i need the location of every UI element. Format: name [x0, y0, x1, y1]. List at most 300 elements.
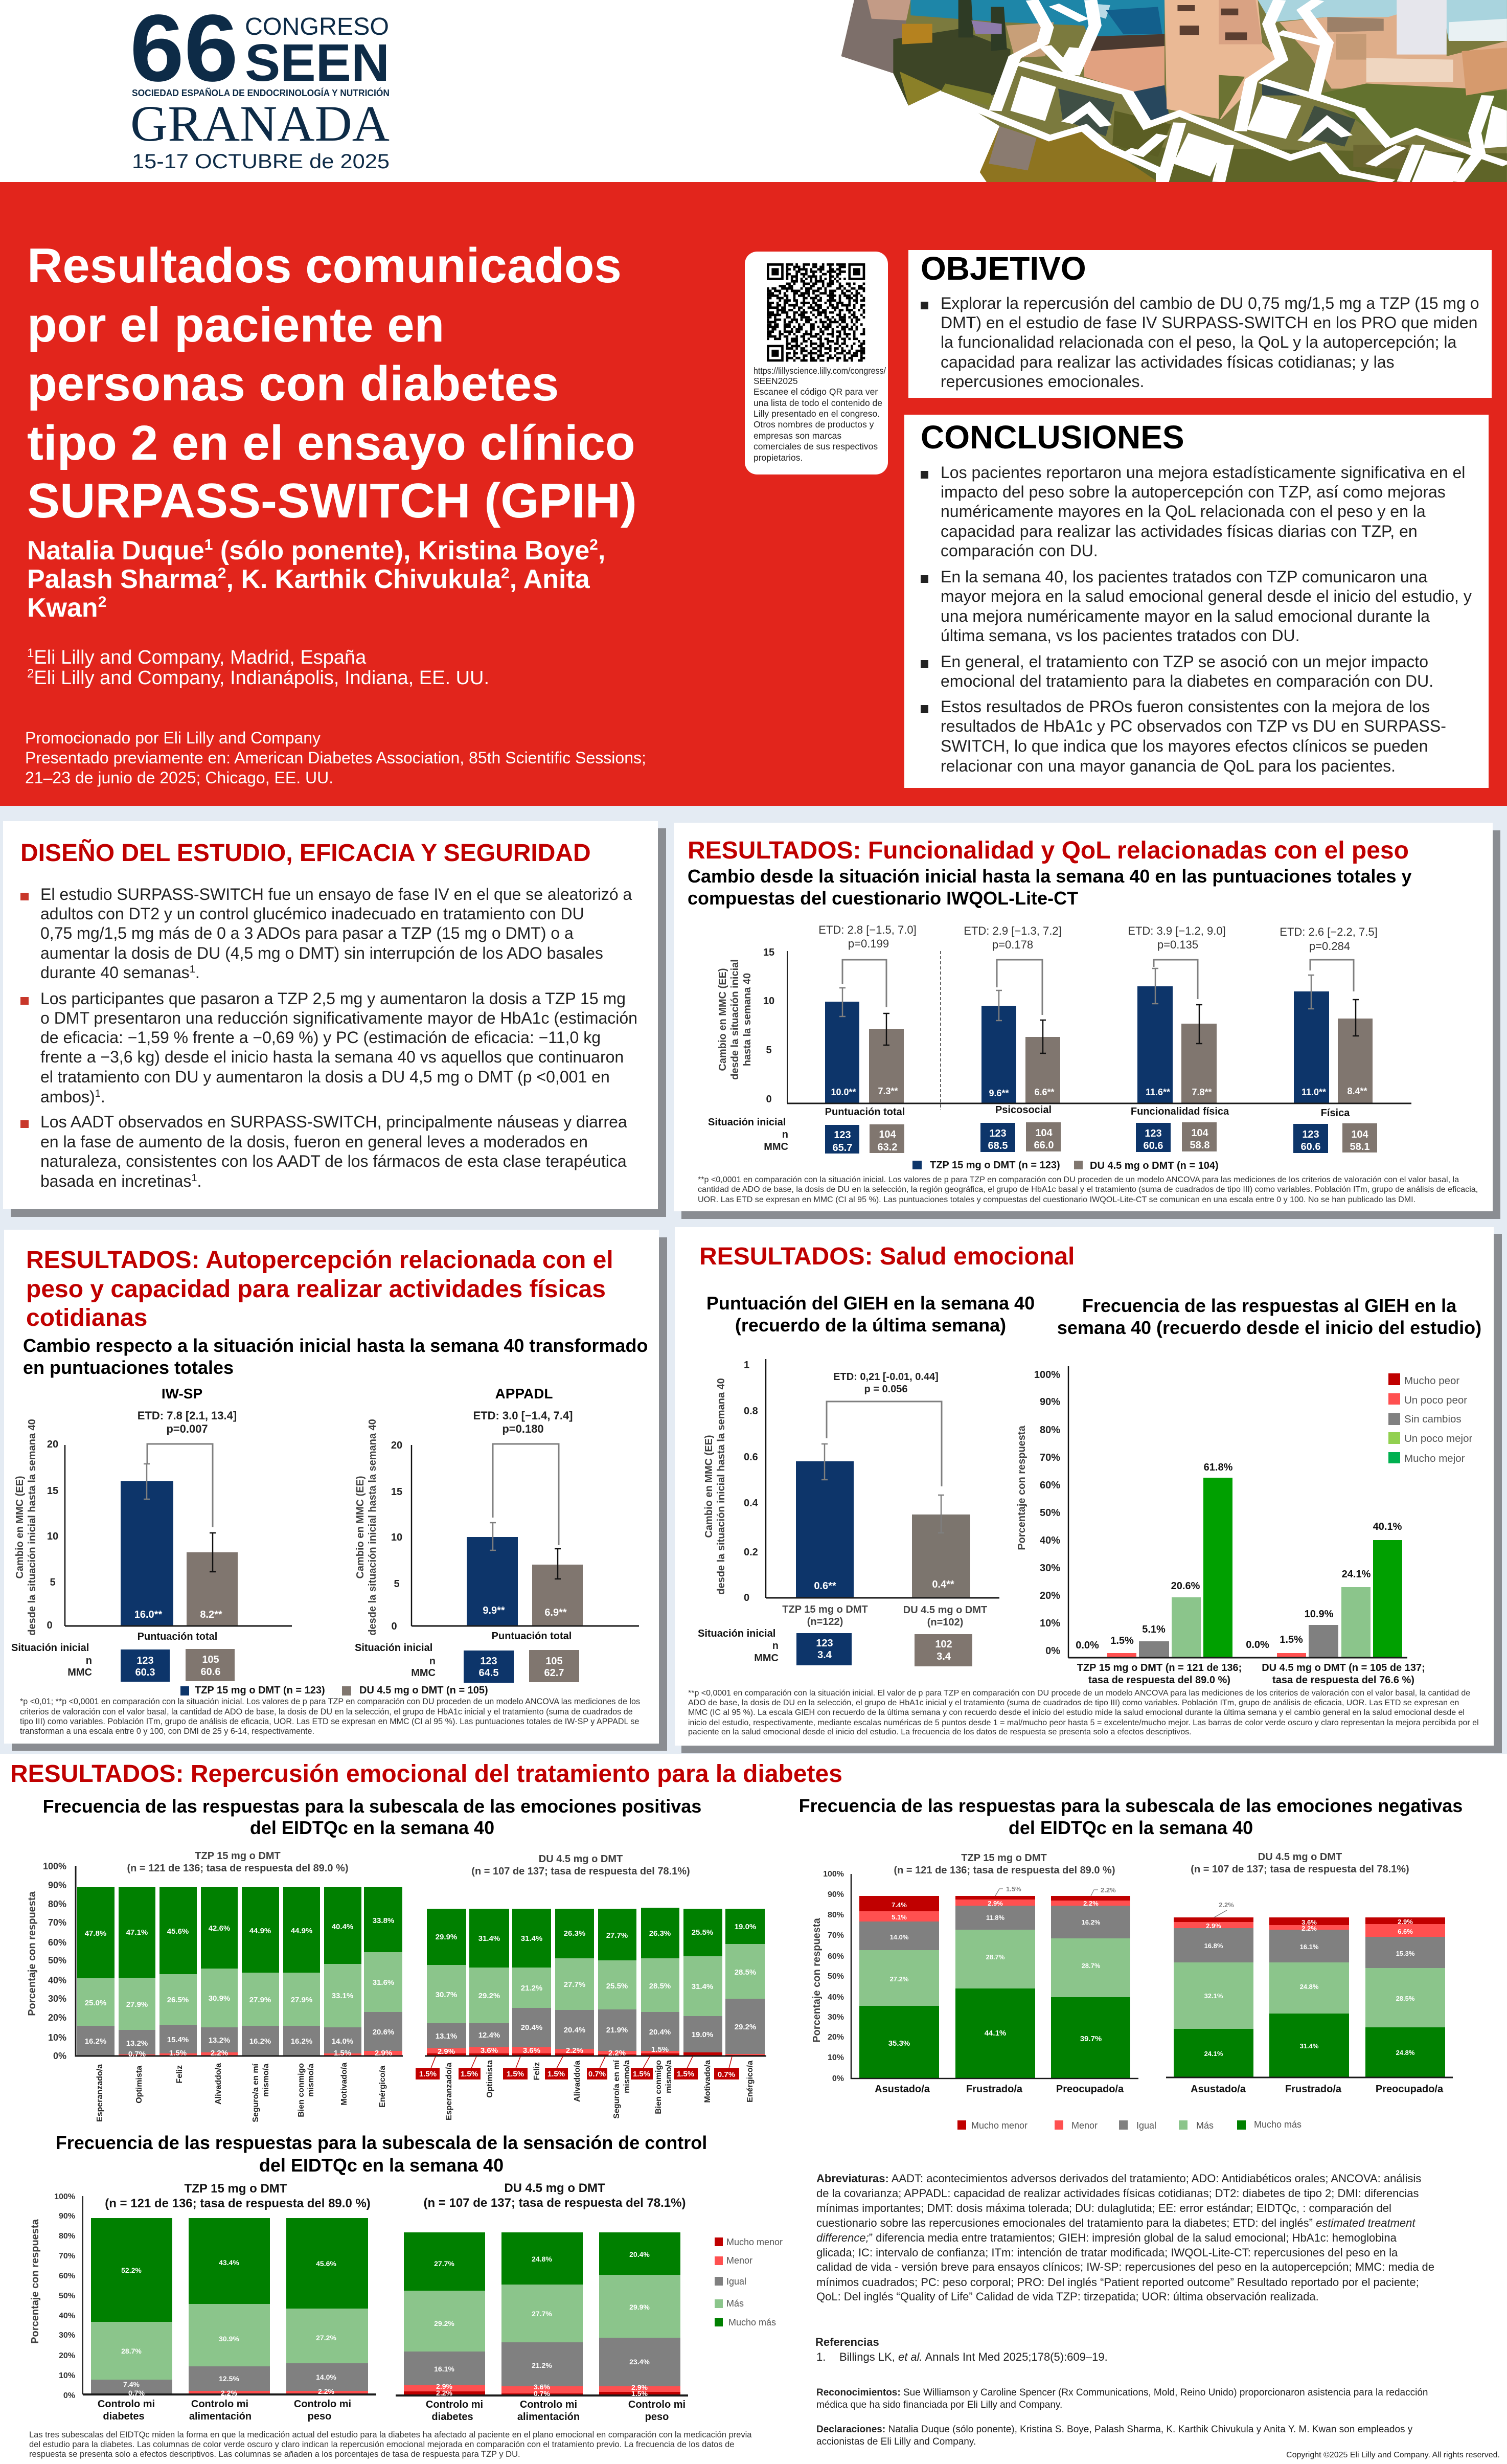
y axis title [717, 959, 753, 1080]
panel: funcionalidad y QoL: RESULTADOS: Funcionalidad y QoL relacionadas con el peso [688, 837, 1409, 864]
stacked chart: positive emotions TZP: 20% [48, 2013, 66, 2023]
bar chart: IW-SP: MMC [67, 1667, 92, 1678]
bar chart: GIEH response frequency: 90% [1040, 1396, 1060, 1408]
bar chart: GIEH score: (n=102) [927, 1617, 963, 1628]
footnote: del estudio para la diabetes. Las columnas de color verde oscuro y claro indican la repercusión emocional mejorada en comparación con el tratamiento previo. La frecuencia de los datos de [29, 2440, 734, 2449]
authors: 1 [204, 536, 213, 553]
stacked chart: negative emotions TZP: 35.3% [888, 2039, 910, 2048]
legend: Mucho menor [726, 2237, 783, 2247]
abbreviations [816, 2172, 1434, 2303]
disclosures: accionistas de Eli Lilly and Company. [816, 2436, 976, 2447]
red callouts: 1.5% [419, 2070, 437, 2078]
stacked chart: positive emotions TZP: Motivado/a [340, 2063, 349, 2106]
stacked chart: positive emotions DU: 19.0% [735, 1923, 756, 1931]
y axis title: hasta la semana 40 [742, 973, 753, 1066]
footnote: Las tres subescalas del EIDTQc miden la forma en que la medicación actual del estudio para la diabetes ha afectado al paciente en el plano emocional en comparación con la medicación previa [29, 2430, 752, 2439]
panel: diseño del estudio: basada en incretinas [40, 1172, 191, 1190]
bar chart: IWQOL-Lite-CT: 7.8** [1192, 1087, 1212, 1097]
stacked chart: negative emotions TZP: 0% [832, 2074, 844, 2083]
stacked chart: positive emotions TZP: 60% [48, 1937, 66, 1948]
stacked chart: sense of control DU: 2.2% [436, 2389, 453, 2397]
QR caption: empresas son marcas [754, 431, 841, 441]
bar chart: IWQOL-Lite-CT: 5 [766, 1045, 772, 1056]
panel: diseño del estudio: ambos) [40, 1088, 95, 1106]
panel: objetivo: OBJETIVO [921, 250, 1086, 287]
stacked chart: sense of control TZP: 30.9% [219, 2335, 239, 2343]
panel: repercusión emocional: del EIDTQc en la semana 40 [250, 1817, 494, 1838]
stacked chart: positive emotions DU: 29.9% [436, 1933, 457, 1941]
affiliations: 1 [27, 646, 34, 660]
baseline table: 63.2 [878, 1142, 897, 1153]
bar chart: APPADL: 15 [391, 1486, 402, 1498]
bar chart: IW-SP: 0 [47, 1620, 53, 1631]
footnote: paciente en la salud emocional desde el inicio del estudio. La frecuencia de los datos de respuesta se presenta solo a efectos descriptivos. [688, 1728, 1192, 1736]
panel: objetivo: repercusiones emocionales. [941, 372, 1144, 391]
stacked chart: positive emotions TZP: 0% [53, 2051, 66, 2061]
bar chart: APPADL: Cambio en MMC (EE) [355, 1476, 366, 1579]
stacked chart: negative emotions TZP: 16.2% [1082, 1918, 1101, 1926]
stacked chart: positive emotions DU: 25.5% [606, 1982, 628, 1991]
stacked chart: positive emotions TZP: Optimista [135, 2066, 144, 2104]
bar chart: APPADL: p=0.180 [502, 1422, 544, 1435]
stacked chart: positive emotions DU: 27.7% [564, 1980, 585, 1989]
abbreviations: mínimas importantes; DMT: dosis máxima tolerada; DU: dulaglutida; EE: error estándar; EIDTQc, : comparación del [816, 2202, 1391, 2214]
stacked chart: negative emotions TZP: (n = 121 de 136; tasa de respuesta del 89.0 %) [894, 1865, 1115, 1876]
bar chart: GIEH response frequency: 0% [1045, 1645, 1060, 1657]
bar chart: GIEH score: DU 4.5 mg o DMT [903, 1604, 987, 1616]
bar chart: APPADL: APPADL [495, 1386, 553, 1401]
abbreviations: QoL: Del inglés “Quality of Life” Calidad de vida TZP: tirzepatida; UOR: última observación realizada. [816, 2290, 1319, 2303]
authors: , [598, 536, 605, 566]
bar chart: IW-SP: 10 [47, 1531, 58, 1542]
poster title: por el paciente en [27, 298, 444, 352]
QR caption: Otros nombres de productos y [754, 419, 874, 429]
stacked chart: negative emotions TZP: Frustrado/a [966, 2084, 1023, 2095]
stacked chart: sense of control TZP: 80% [59, 2232, 75, 2241]
disclosures [816, 2424, 1413, 2447]
stacked chart: positive emotions DU: 26.3% [564, 1929, 585, 1938]
abbreviations: glicada; IC: intervalo de confianza; ITm: intención de tratar modificada; IWQOL-Lite-CT: repercusiones del peso en la [816, 2246, 1398, 2259]
QR caption [754, 366, 886, 463]
stacked chart: positive emotions TZP: 100% [43, 1861, 66, 1871]
bar chart: GIEH response frequency: TZP 15 mg o DMT (n = 121 de 136; [1077, 1662, 1242, 1674]
stacked chart: positive emotions TZP: Seguro/a en mí [252, 2063, 260, 2122]
congress logo: SOCIEDAD ESPAÑOLA DE ENDOCRINOLOGÍA Y NUTRICIÓN [132, 87, 390, 98]
stacked chart: negative emotions DU: 2.9% [1398, 1918, 1413, 1926]
panel: diseño del estudio: . [101, 1088, 105, 1106]
authors: (sólo ponente), Kristina Boye [213, 536, 589, 566]
baseline table: 104 [879, 1129, 897, 1140]
stacked chart: sense of control TZP: 30% [59, 2331, 75, 2340]
legend: Mucho más [728, 2317, 776, 2327]
stacked chart: positive emotions TZP: 31.6% [373, 1978, 394, 1987]
stacked chart: sense of control TZP: Controlo mi [191, 2399, 248, 2410]
footnote: *p <0,01; **p <0,0001 en comparación con la situación inicial. Los valores de p para TZP en comparación con DU proceden de un modelo ANCOVA las mediciones de los [20, 1697, 640, 1706]
bar chart: IW-SP: 15 [47, 1485, 58, 1497]
sponsor note: Presentado previamente en: American Diabetes Association, 85th Scientific Sessions; [25, 749, 646, 767]
ETD annotations [818, 923, 1378, 953]
ETD annotations: p=0.135 [1157, 938, 1198, 951]
legend [715, 2237, 783, 2327]
stacked chart: positive emotions TZP: (n = 121 de 136; tasa de respuesta del 89.0 %) [127, 1863, 349, 1874]
gray callouts: 2.2% [1101, 1886, 1116, 1894]
authors: 2 [501, 565, 510, 582]
congress logo: 15-17 OCTUBRE de 2025 [132, 150, 390, 173]
baseline table: 66.0 [1034, 1140, 1054, 1151]
bar chart: GIEH score: 0.6 [744, 1452, 758, 1463]
stacked chart: sense of control DU [396, 2181, 688, 2423]
acknowledgements [816, 2387, 1428, 2410]
panel: autopercepción y APPADL: en puntuaciones totales [23, 1357, 234, 1378]
stacked chart: sense of control DU: 23.4% [629, 2358, 650, 2366]
stacked chart: positive emotions TZP: mismo/a [307, 2064, 315, 2097]
bar chart: APPADL: desde la situación inicial hasta la semana 40 [367, 1419, 378, 1636]
bar chart: APPADL: 123 [480, 1656, 497, 1667]
red callouts: 1.5% [507, 2070, 524, 2078]
bar chart: APPADL: 0 [391, 1621, 397, 1632]
stacked chart: negative emotions DU: 6.6% [1398, 1928, 1413, 1935]
stacked chart: sense of control TZP: 70% [59, 2252, 75, 2260]
panel: diseño del estudio: o DMT presentaron una reducción significativamente mayor de HbA1c (estimación [40, 1009, 637, 1027]
footnote [29, 2430, 752, 2459]
panel: conclusiones: resultados de HbA1c y PC observados con TZP vs DU en SURPASS- [941, 717, 1446, 735]
baseline table: 123 [834, 1129, 851, 1141]
footnote [688, 1689, 1479, 1736]
panel: funcionalidad y QoL: compuestas del cuestionario IWQOL-Lite-CT [688, 888, 1078, 909]
legend [1388, 1373, 1472, 1464]
QR card [745, 252, 888, 474]
stacked chart: positive emotions TZP: 27.9% [249, 1996, 271, 2004]
stacked chart: sense of control TZP: diabetes [103, 2411, 145, 2422]
stacked chart: sense of control TZP: TZP 15 mg o DMT [185, 2182, 287, 2196]
abbreviations: difference;” diferencia media entre tratamientos; GIEH: impresión global de la salud emocional; HbA1c: hemoglobina [816, 2231, 1397, 2244]
bar chart: GIEH response frequency: 1.5% [1110, 1635, 1134, 1646]
stacked chart: positive emotions TZP: 30.9% [209, 1994, 230, 2003]
bar chart: GIEH score: 0 [744, 1592, 749, 1603]
stacked chart: sense of control DU: (n = 107 de 137; tasa de respuesta del 78.1%) [424, 2196, 686, 2210]
bar chart: GIEH score: ETD: 0,21 [-0.01, 0.44] [833, 1371, 939, 1383]
stacked chart: negative emotions TZP: 20% [828, 2033, 844, 2042]
bar chart: GIEH score [698, 1359, 999, 1666]
panel: diseño del estudio: frente a −3,6 kg) desde el inicio hasta la semana 40 vs aquellos que continuaron [40, 1048, 624, 1066]
bar chart: GIEH response frequency: tasa de respuesta del 89.0 %) [1088, 1675, 1230, 1686]
stacked chart: negative emotions DU: (n = 107 de 137; tasa de respuesta del 78.1%) [1191, 1864, 1409, 1875]
ETD annotations: p=0.284 [1309, 940, 1350, 953]
bar chart: GIEH response frequency: 1.5% [1280, 1634, 1303, 1645]
bar chart: GIEH score: desde la situación inicial hasta la semana 40 [716, 1378, 727, 1595]
stacked chart: sense of control TZP: 10% [59, 2371, 75, 2380]
stacked chart: positive emotions DU: 31.4% [692, 1982, 713, 1991]
stacked chart: positive emotions TZP: Feliz [175, 2065, 184, 2084]
sponsor note: Promocionado por Eli Lilly and Company [25, 729, 321, 747]
panel: salud emocional: Puntuación del GIEH en la semana 40 [706, 1293, 1035, 1314]
panel: diseño del estudio: DISEÑO DEL ESTUDIO, EFICACIA Y SEGURIDAD [20, 839, 591, 867]
footnote: criterios de valoración con el valor basal, la cantidad de ADO de base, la dosis de DU en la selección, el grupo de HbA1c inicial y el tratamiento (suma de cuadrados de [20, 1707, 633, 1716]
panel: conclusiones: mayor mejora en la salud emocional general desde el inicio del estudio, y [941, 587, 1472, 605]
bar chart: IWQOL-Lite-CT: 11.0** [1302, 1087, 1326, 1097]
stacked chart: sense of control DU: 27.7% [532, 2310, 552, 2318]
stacked chart: negative emotions DU: 2.9% [1206, 1922, 1221, 1930]
stacked chart: positive emotions TZP: 15.4% [167, 2036, 189, 2044]
footnote: MMC (IC al 95 %). La escala GIEH con recuerdo de la última semana y con recuerdo desde el inicio del estudio mide la salud emocional durante la última semana y el cambio general en la salud emocional desde el [688, 1708, 1465, 1717]
QR caption: una lista de todo el contenido de [754, 398, 882, 408]
bar chart: GIEH response frequency: 100% [1034, 1369, 1060, 1381]
stacked chart: sense of control TZP: 7.4% [123, 2380, 140, 2388]
red callouts: 1.5% [633, 2070, 650, 2078]
panel: conclusiones: numéricamente mayores en la QoL relacionada con el peso y en la [941, 502, 1426, 521]
bar chart: GIEH response frequency: 40.1% [1373, 1521, 1402, 1532]
panel: diseño del estudio: en la fase de aumento de la dosis, fueron en general leves a moderados en [40, 1133, 588, 1151]
red callouts: 0.7% [588, 2070, 606, 2078]
stacked chart: negative emotions DU: 24.8% [1300, 1983, 1319, 1991]
bar chart: GIEH score: 102 [935, 1639, 952, 1650]
stacked chart: positive emotions DU: 30.7% [436, 1991, 457, 1999]
stacked chart: positive emotions TZP: 40% [48, 1975, 66, 1985]
references [815, 2336, 1108, 2363]
stacked chart: sense of control TZP: 0.7% [128, 2389, 145, 2397]
legend: Igual [726, 2276, 746, 2287]
stacked chart: positive emotions TZP: mismo/a [262, 2064, 270, 2097]
bar chart: IW-SP: desde la situación inicial hasta la semana 40 [27, 1419, 38, 1636]
bar chart: GIEH score: 0.6** [814, 1580, 836, 1592]
bar chart: IW-SP [11, 1386, 292, 1682]
panel: diseño del estudio: adultos con DT2 y un control glucémico inadecuado en tratamiento con DU [40, 905, 584, 923]
stacked chart: positive emotions TZP: 44.9% [291, 1927, 312, 1935]
abbreviations: calidad de vida - versión breve para ensayos clínicos; IW-SP: repercusiones del peso en la autopercepción; MMC: media de [816, 2260, 1434, 2273]
references: Billings LK, et al. Annals Int Med 2025;178(5):609–19. [839, 2350, 1108, 2363]
stacked chart: negative emotions DU [1166, 1851, 1453, 2095]
acknowledgements: Reconocimientos: Sue Williamson y Caroline Spencer (Rx Communications, Mold, Reino Unido) proporcionaron asistencia para la redacción [816, 2387, 1428, 2398]
stacked chart: positive emotions DU: 28.5% [735, 1968, 756, 1977]
panel: diseño del estudio: aumentar la dosis de DU (4,5 mg o DMT) sin interrupción de los ADO basales [40, 944, 603, 962]
stacked chart: sense of control DU: alimentación [517, 2411, 580, 2423]
stacked chart: negative emotions TZP: 10% [828, 2053, 844, 2062]
bar chart: GIEH response frequency: 50% [1040, 1507, 1060, 1519]
legend: Sin cambios [1404, 1413, 1462, 1425]
panel: objetivo: capacidad para realizar las actividades físicas cotidianas; y las [941, 353, 1395, 371]
stacked chart: positive emotions DU: 20.4% [649, 2028, 671, 2037]
bar chart: GIEH score: 0.4 [744, 1498, 759, 1509]
stacked chart: positive emotions TZP: 10% [48, 2032, 66, 2043]
bar chart: IW-SP: Situación inicial [11, 1642, 89, 1654]
stacked chart: sense of control TZP: 60% [59, 2272, 75, 2280]
ETD annotations: ETD: 2.9 [−1.3, 7.2] [964, 924, 1062, 937]
panel: conclusiones [904, 415, 1489, 788]
bar chart: IWQOL-Lite-CT: 9.6** [989, 1088, 1009, 1098]
stacked chart: positive emotions DU: 3.6% [481, 2046, 498, 2055]
abbreviations: Abreviaturas: AADT: acontecimientos adversos derivados del tratamiento; ADO: Antidiabéticos orales; ANCOVA: análisis [816, 2172, 1421, 2185]
stacked chart: negative emotions DU: DU 4.5 mg o DMT [1258, 1851, 1342, 1863]
panel: salud emocional: Frecuencia de las respuestas al GIEH en la [1082, 1295, 1457, 1316]
panel: repercusión emocional: RESULTADOS: Repercusión emocional del tratamiento para la diabetes [10, 1760, 842, 1788]
bar chart: GIEH response frequency: 10.9% [1305, 1609, 1334, 1620]
ETD annotations: ETD: 3.9 [−1.2, 9.0] [1128, 924, 1226, 937]
legend [912, 1160, 1219, 1171]
stacked chart: negative emotions DU: Preocupado/a [1376, 2084, 1444, 2095]
y axis title: desde la situación inicial [729, 959, 741, 1080]
ETD annotations: p=0.178 [992, 938, 1033, 951]
panel: diseño del estudio [3, 821, 666, 1217]
bar chart: GIEH response frequency: 61.8% [1204, 1462, 1233, 1473]
bar chart: IWQOL-Lite-CT: Funcionalidad física [1131, 1106, 1229, 1117]
stacked chart: sense of control TZP: 12.5% [219, 2375, 239, 2383]
references: Referencias [815, 2336, 879, 2348]
congress logo: CONGRESO [245, 13, 389, 40]
stacked chart: positive emotions TZP: 1.5% [334, 2049, 351, 2058]
bar chart: IWQOL-Lite-CT: Física [1321, 1107, 1350, 1119]
stacked chart: sense of control DU: diabetes [431, 2411, 473, 2423]
bar chart: GIEH response frequency: tasa de respuesta del 76.6 %) [1272, 1675, 1414, 1686]
stacked chart: positive emotions DU: 25.5% [692, 1928, 713, 1937]
gray callouts: 1.5% [1006, 1885, 1021, 1893]
baseline table: 65.7 [833, 1142, 852, 1154]
stacked chart: negative emotions TZP: 44.1% [985, 2029, 1006, 2038]
panel: diseño del estudio: de eficacia: −1,59 % frente a −0,69 %) y PC (estimación de eficacia: −11,0 kg [40, 1028, 601, 1047]
panel: objetivo: Explorar la repercusión del cambio de DU 0,75 mg/1,5 mg a TZP (15 mg o [941, 294, 1479, 312]
panel: conclusiones: relacionar con una mayor ganancia de QoL para los pacientes. [941, 757, 1396, 775]
panel: conclusiones: CONCLUSIONES [921, 419, 1184, 456]
bar chart: IW-SP: Puntuación total [138, 1631, 217, 1642]
stacked chart: negative emotions TZP: Asustado/a [875, 2084, 930, 2095]
bar chart: APPADL: 64.5 [479, 1667, 498, 1679]
stacked chart: sense of control DU: 16.1% [434, 2365, 454, 2373]
footnote: tipo III) como variables. Población ITm, grupo de análisis de eficacia, UOR. Las ETD se expresan en MMC (CI al 95 %). Las puntuaciones totales de IW-SP y APPADL se [20, 1717, 639, 1726]
footnote: **p <0,0001 en comparación con la situación inicial. Los valores de p para TZP en comparación con DU proceden de un modelo ANCOVA para las mediciones de los criterios de valoración con el valor basal, la [698, 1175, 1459, 1184]
stacked chart: sense of control DU: peso [645, 2411, 669, 2423]
stacked chart: sense of control TZP: 40% [59, 2312, 75, 2320]
footnote: respuesta se presenta solo a efectos descriptivos. Las columnas se añaden a los porcentajes de tasa de respuesta para TZP y DU. [29, 2450, 520, 2459]
affiliations [27, 646, 489, 689]
stacked chart: sense of control TZP: alimentación [189, 2411, 252, 2422]
stacked chart: negative emotions TZP: 11.8% [986, 1914, 1005, 1922]
stacked chart: negative emotions TZP: 100% [823, 1870, 844, 1879]
bar chart: GIEH score: 3.4 [817, 1649, 832, 1661]
footnote: inicio del estudio, respectivamente, mediante escalas numéricas de 5 puntos desde 1 = mal/mucho peor hasta 5 = excelente/mucho mejor. Las barras de color verde oscuro y claro representan la mejora percibida por el [688, 1719, 1479, 1727]
panel: diseño del estudio: 1 [95, 1088, 101, 1099]
stacked chart: positive emotions TZP: 44.9% [249, 1927, 271, 1935]
legend: Más [1196, 2120, 1214, 2131]
stacked chart: positive emotions TZP: 47.8% [85, 1929, 106, 1938]
panel: diseño del estudio: Los participantes que pasaron a TZP 2,5 mg y aumentaron la dosis a TZP 15 mg [40, 989, 626, 1008]
abbreviations: mínimos cuadrados; PC: peso corporal; PRO: Del inglés “Patient reported outcome” Resultado reportado por el paciente; [816, 2276, 1419, 2289]
panel: repercusión emocional: Frecuencia de las respuestas para la subescala de las emociones positivas [43, 1796, 701, 1817]
stacked chart: sense of control TZP: Controlo mi [294, 2399, 351, 2410]
stacked chart: negative emotions TZP: 39.7% [1080, 2035, 1102, 2043]
panel: objetivo: la funcionalidad relacionada con el peso, la QoL y la autopercepción; la [941, 333, 1456, 351]
stacked chart: positive emotions TZP: 25.0% [85, 1999, 106, 2007]
baseline table [708, 1117, 1377, 1154]
bar chart: GIEH response frequency: 20% [1040, 1590, 1060, 1601]
stacked chart: negative emotions TZP: 80% [828, 1911, 844, 1919]
header image: Alhambra with geometric pattern [828, 0, 1507, 182]
stacked chart: sense of control DU: Controlo mi [520, 2399, 577, 2410]
abbreviations: cuestionario sobre las repercusiones emocionales del tratamiento para la diabetes; ETD: del inglés” estimated treatment [816, 2217, 1415, 2229]
panel: conclusiones: impacto del peso sobre la autopercepción con TZP, así como mejoras [941, 483, 1446, 501]
panel: diseño del estudio: durante 40 semanas [40, 963, 190, 982]
copyright: Copyright ©2025 Eli Lilly and Company. All rights reserved. [1286, 2451, 1500, 2459]
bar chart: IW-SP: Cambio en MMC (EE) [14, 1476, 26, 1579]
stacked chart: sense of control TZP: 90% [59, 2212, 75, 2221]
red callouts: 1.5% [461, 2070, 478, 2078]
stacked chart: positive emotions DU: 31.4% [478, 1934, 500, 1943]
baseline table: 58.1 [1350, 1141, 1369, 1152]
footnote: ADO de base, la dosis de DU en la selección, el grupo de HbA1c inicial y el tratamiento (suma de cuadrados de tipo III) como variables. Población ITm, grupo de análisis de eficacia, UOR. Las ETD se expresan en [688, 1699, 1459, 1707]
stacked chart: sense of control DU: 20.4% [629, 2250, 650, 2258]
panel: conclusiones: emocional del tratamiento para la diabetes en comparación con DU. [941, 672, 1433, 690]
stacked chart: positive emotions TZP: 16.2% [85, 2037, 106, 2046]
bar chart: GIEH score: 0.2 [744, 1547, 758, 1558]
stacked chart: negative emotions DU: 16.8% [1204, 1942, 1223, 1950]
QR code [767, 263, 865, 361]
affiliations: Eli Lilly and Company, Madrid, España [34, 647, 367, 668]
stacked chart: negative emotions DU: 32.1% [1204, 1992, 1223, 2000]
bar chart: GIEH score: MMC [754, 1653, 779, 1664]
stacked chart: positive emotions TZP: 80% [48, 1899, 66, 1909]
stacked chart: positive emotions TZP: Esperanzado/a [96, 2064, 104, 2122]
stacked chart: positive emotions DU: 27.7% [606, 1931, 628, 1940]
stacked chart: positive emotions TZP: Enérgico/a [378, 2066, 387, 2108]
stacked chart: positive emotions TZP: 2.2% [211, 2049, 228, 2058]
stacked chart: negative emotions DU: 31.4% [1300, 2042, 1319, 2050]
panel: conclusiones: SWITCH, lo que indica que los mayores efectos clínicos se pueden [941, 737, 1428, 755]
authors: 2 [589, 536, 598, 553]
bar chart: IW-SP: 105 [202, 1654, 219, 1665]
panel: salud emocional: RESULTADOS: Salud emocional [699, 1243, 1075, 1270]
stacked chart: sense of control TZP: 45.6% [316, 2259, 336, 2268]
bar chart: GIEH response frequency: Porcentaje con respuesta [1016, 1425, 1028, 1550]
QR caption: Escanee el código QR para ver [754, 387, 878, 397]
stacked chart: negative emotions TZP: 28.7% [1082, 1962, 1101, 1970]
authors: 2 [218, 565, 226, 582]
QR caption: SEEN2025 [754, 376, 798, 386]
stacked chart: sense of control TZP: 0% [63, 2391, 75, 2400]
stacked chart: positive emotions DU: DU 4.5 mg o DMT [539, 1853, 623, 1865]
y axis title: Cambio en MMC (EE) [717, 968, 728, 1071]
panel: conclusiones: última semana, vs los pacientes tratados con DU. [941, 626, 1300, 645]
stacked chart: positive emotions TZP: 40.4% [332, 1923, 353, 1931]
ETD annotations: ETD: 2.6 [−2.2, 7.5] [1280, 925, 1378, 938]
stacked chart: positive emotions TZP: 16.2% [291, 2037, 312, 2046]
references: 1. [816, 2350, 826, 2363]
stacked chart: negative emotions TZP: Porcentaje con respuesta [811, 1917, 823, 2043]
stacked chart: sense of control DU: 1.5% [631, 2389, 648, 2398]
panel: autopercepción y APPADL [4, 1230, 667, 1751]
bar chart: GIEH score: n [772, 1640, 779, 1652]
bar chart: APPADL [355, 1386, 639, 1683]
bar chart: IW-SP: p=0.007 [166, 1422, 208, 1435]
stacked chart: sense of control DU: 29.9% [629, 2303, 650, 2311]
panel: diseño del estudio: . [195, 963, 200, 982]
panel: diseño del estudio: el tratamiento con DU y aumentaron la dosis a DU 4,5 mg o DMT (p <0,001 en [40, 1068, 610, 1086]
authors: Kwan [27, 593, 98, 623]
stacked chart: positive emotions TZP: 13.2% [126, 2039, 148, 2048]
congress logo [130, 0, 390, 173]
header band [0, 0, 1507, 182]
stacked chart: positive emotions DU: 13.1% [436, 2032, 457, 2041]
stacked chart: sense of control TZP: Controlo mi [98, 2399, 155, 2410]
stacked chart: positive emotions DU: Bien conmigo [654, 2060, 663, 2114]
stacked chart: positive emotions DU: Esperanzado/a [445, 2063, 453, 2120]
stacked chart: positive emotions DU: 29.2% [478, 1992, 500, 2000]
legend: DU 4.5 mg o DMT (n = 105) [359, 1685, 488, 1696]
footnote: transforman a una escala entre 0 y 100, con DMI de 25 y 6-14, respectivamente. [20, 1727, 314, 1736]
stacked chart: positive emotions TZP: Bien conmigo [297, 2063, 306, 2117]
stacked chart: sense of control TZP: 2.2% [221, 2389, 238, 2397]
panel: diseño del estudio: El estudio SURPASS-SWITCH fue un ensayo de fase IV en el que se aleatorizó a [40, 885, 632, 903]
stacked chart: negative emotions TZP: 50% [828, 1972, 844, 1981]
poster title: tipo 2 en el ensayo clínico [27, 416, 635, 470]
bar chart: GIEH score: (n=122) [807, 1616, 843, 1627]
